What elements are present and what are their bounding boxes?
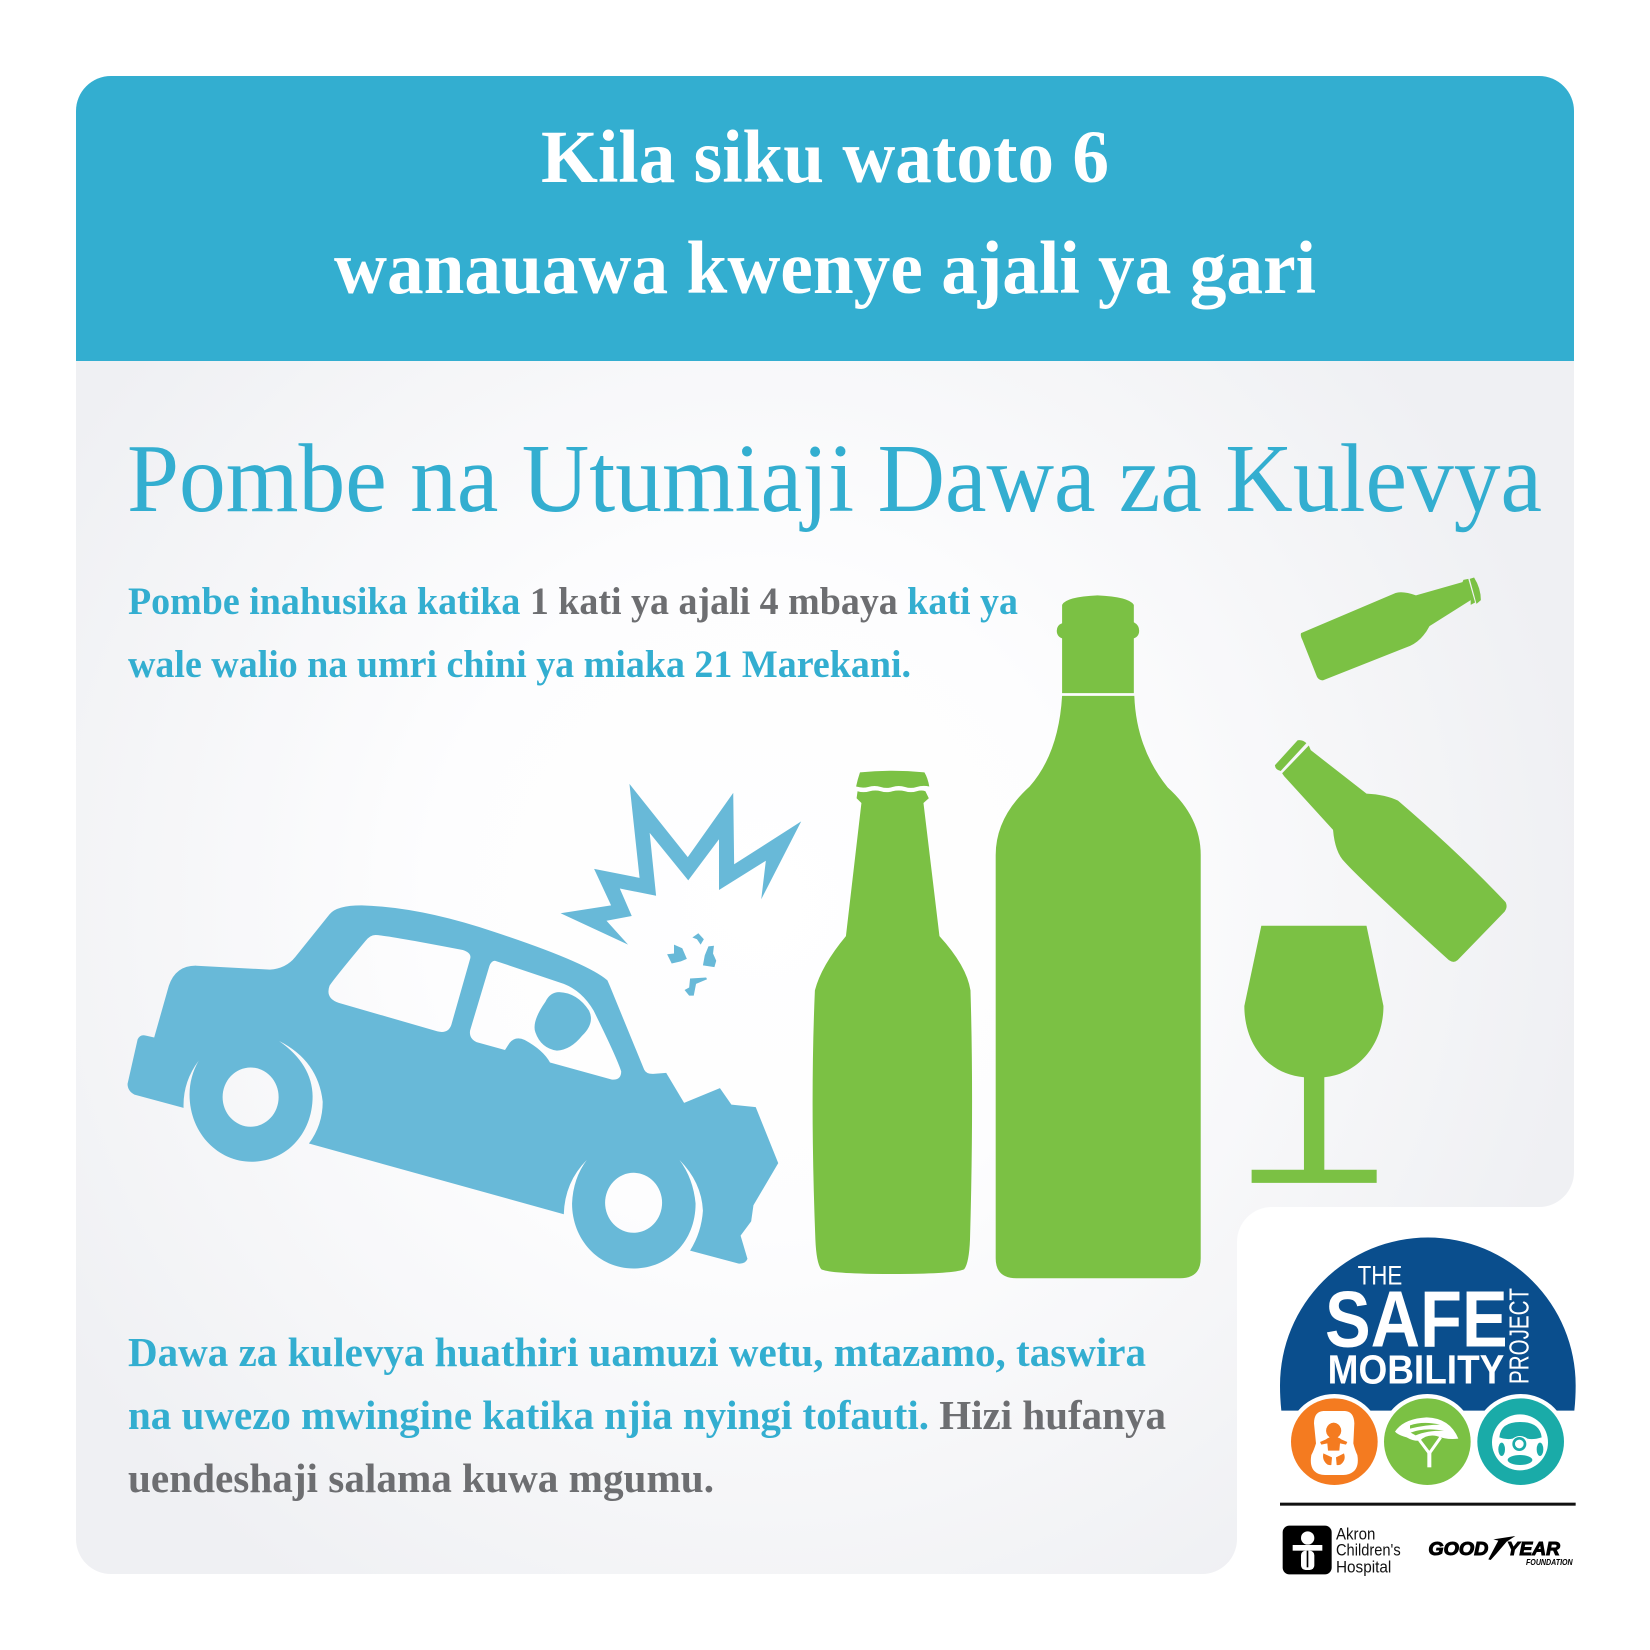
logo: Goodyear Foundation: YEAR xyxy=(1507,1538,1561,1559)
car body xyxy=(128,905,778,1269)
icon: wine glass xyxy=(1244,926,1383,1183)
logo wordmark: THE xyxy=(1358,1261,1402,1291)
title xyxy=(334,116,1316,310)
logo wordmark: PROJECT xyxy=(1503,1288,1534,1384)
icon: crashed car xyxy=(128,784,801,1269)
icon: large bottle xyxy=(996,595,1201,1278)
debris xyxy=(667,933,716,996)
divider rule xyxy=(1280,1503,1576,1506)
icon: beer bottle xyxy=(813,771,972,1274)
icon: tilted small bottle xyxy=(1301,577,1481,680)
icon: car seat xyxy=(1291,1398,1378,1485)
logo: Akron Children's Hospital: Children's xyxy=(1336,1540,1401,1559)
icon: steering wheel xyxy=(1477,1398,1564,1485)
icon: bicycle helmet xyxy=(1384,1398,1471,1485)
title: Kila siku watoto 6 xyxy=(541,116,1109,199)
text block: drug effects: na uwezo mwingine katika njia nyingi tofauti. Hizi hufanya xyxy=(128,1392,1166,1438)
icon: tilted bottle xyxy=(1275,740,1507,962)
text block: drug effects xyxy=(128,1329,1166,1501)
logo wordmark xyxy=(1325,1261,1534,1392)
logo: Goodyear Foundation xyxy=(1428,1536,1573,1567)
logo: Akron Children's Hospital: Hospital xyxy=(1336,1557,1391,1576)
heading: Pombe na Utumiaji Dawa za Kulevya xyxy=(127,425,1542,532)
text block: alcohol statistic xyxy=(128,580,1018,686)
text block: drug effects: Dawa za kulevya huathiri uamuzi wetu, mtazamo, taswira xyxy=(128,1329,1146,1375)
logo: Safe Mobility Project xyxy=(1280,1238,1576,1576)
crash burst xyxy=(561,784,801,945)
icon rings xyxy=(1287,1394,1568,1489)
icon: bottles and glass xyxy=(813,577,1507,1278)
badge semicircle xyxy=(1280,1238,1576,1411)
logo: Goodyear Foundation: FOUNDATION xyxy=(1526,1557,1573,1567)
panel: header banner xyxy=(76,76,1574,361)
logo: Goodyear Foundation: GOOD xyxy=(1428,1538,1488,1559)
logo: Akron Children's Hospital: Akron xyxy=(1336,1524,1375,1543)
logo: Akron Children's Hospital xyxy=(1283,1524,1401,1576)
logo wordmark: SAFE xyxy=(1325,1275,1508,1364)
logo wordmark: MOBILITY xyxy=(1328,1346,1504,1392)
title: wanauawa kwenye ajali ya gari xyxy=(334,227,1316,310)
text block: alcohol statistic: Pombe inahusika katika 1 kati ya ajali 4 mbaya kati ya xyxy=(128,580,1018,623)
text block: alcohol statistic: wale walio na umri chini ya miaka 21 Marekani. xyxy=(128,643,911,686)
text block: drug effects: uendeshaji salama kuwa mgumu. xyxy=(128,1455,714,1501)
panel: content background xyxy=(76,355,1574,1574)
